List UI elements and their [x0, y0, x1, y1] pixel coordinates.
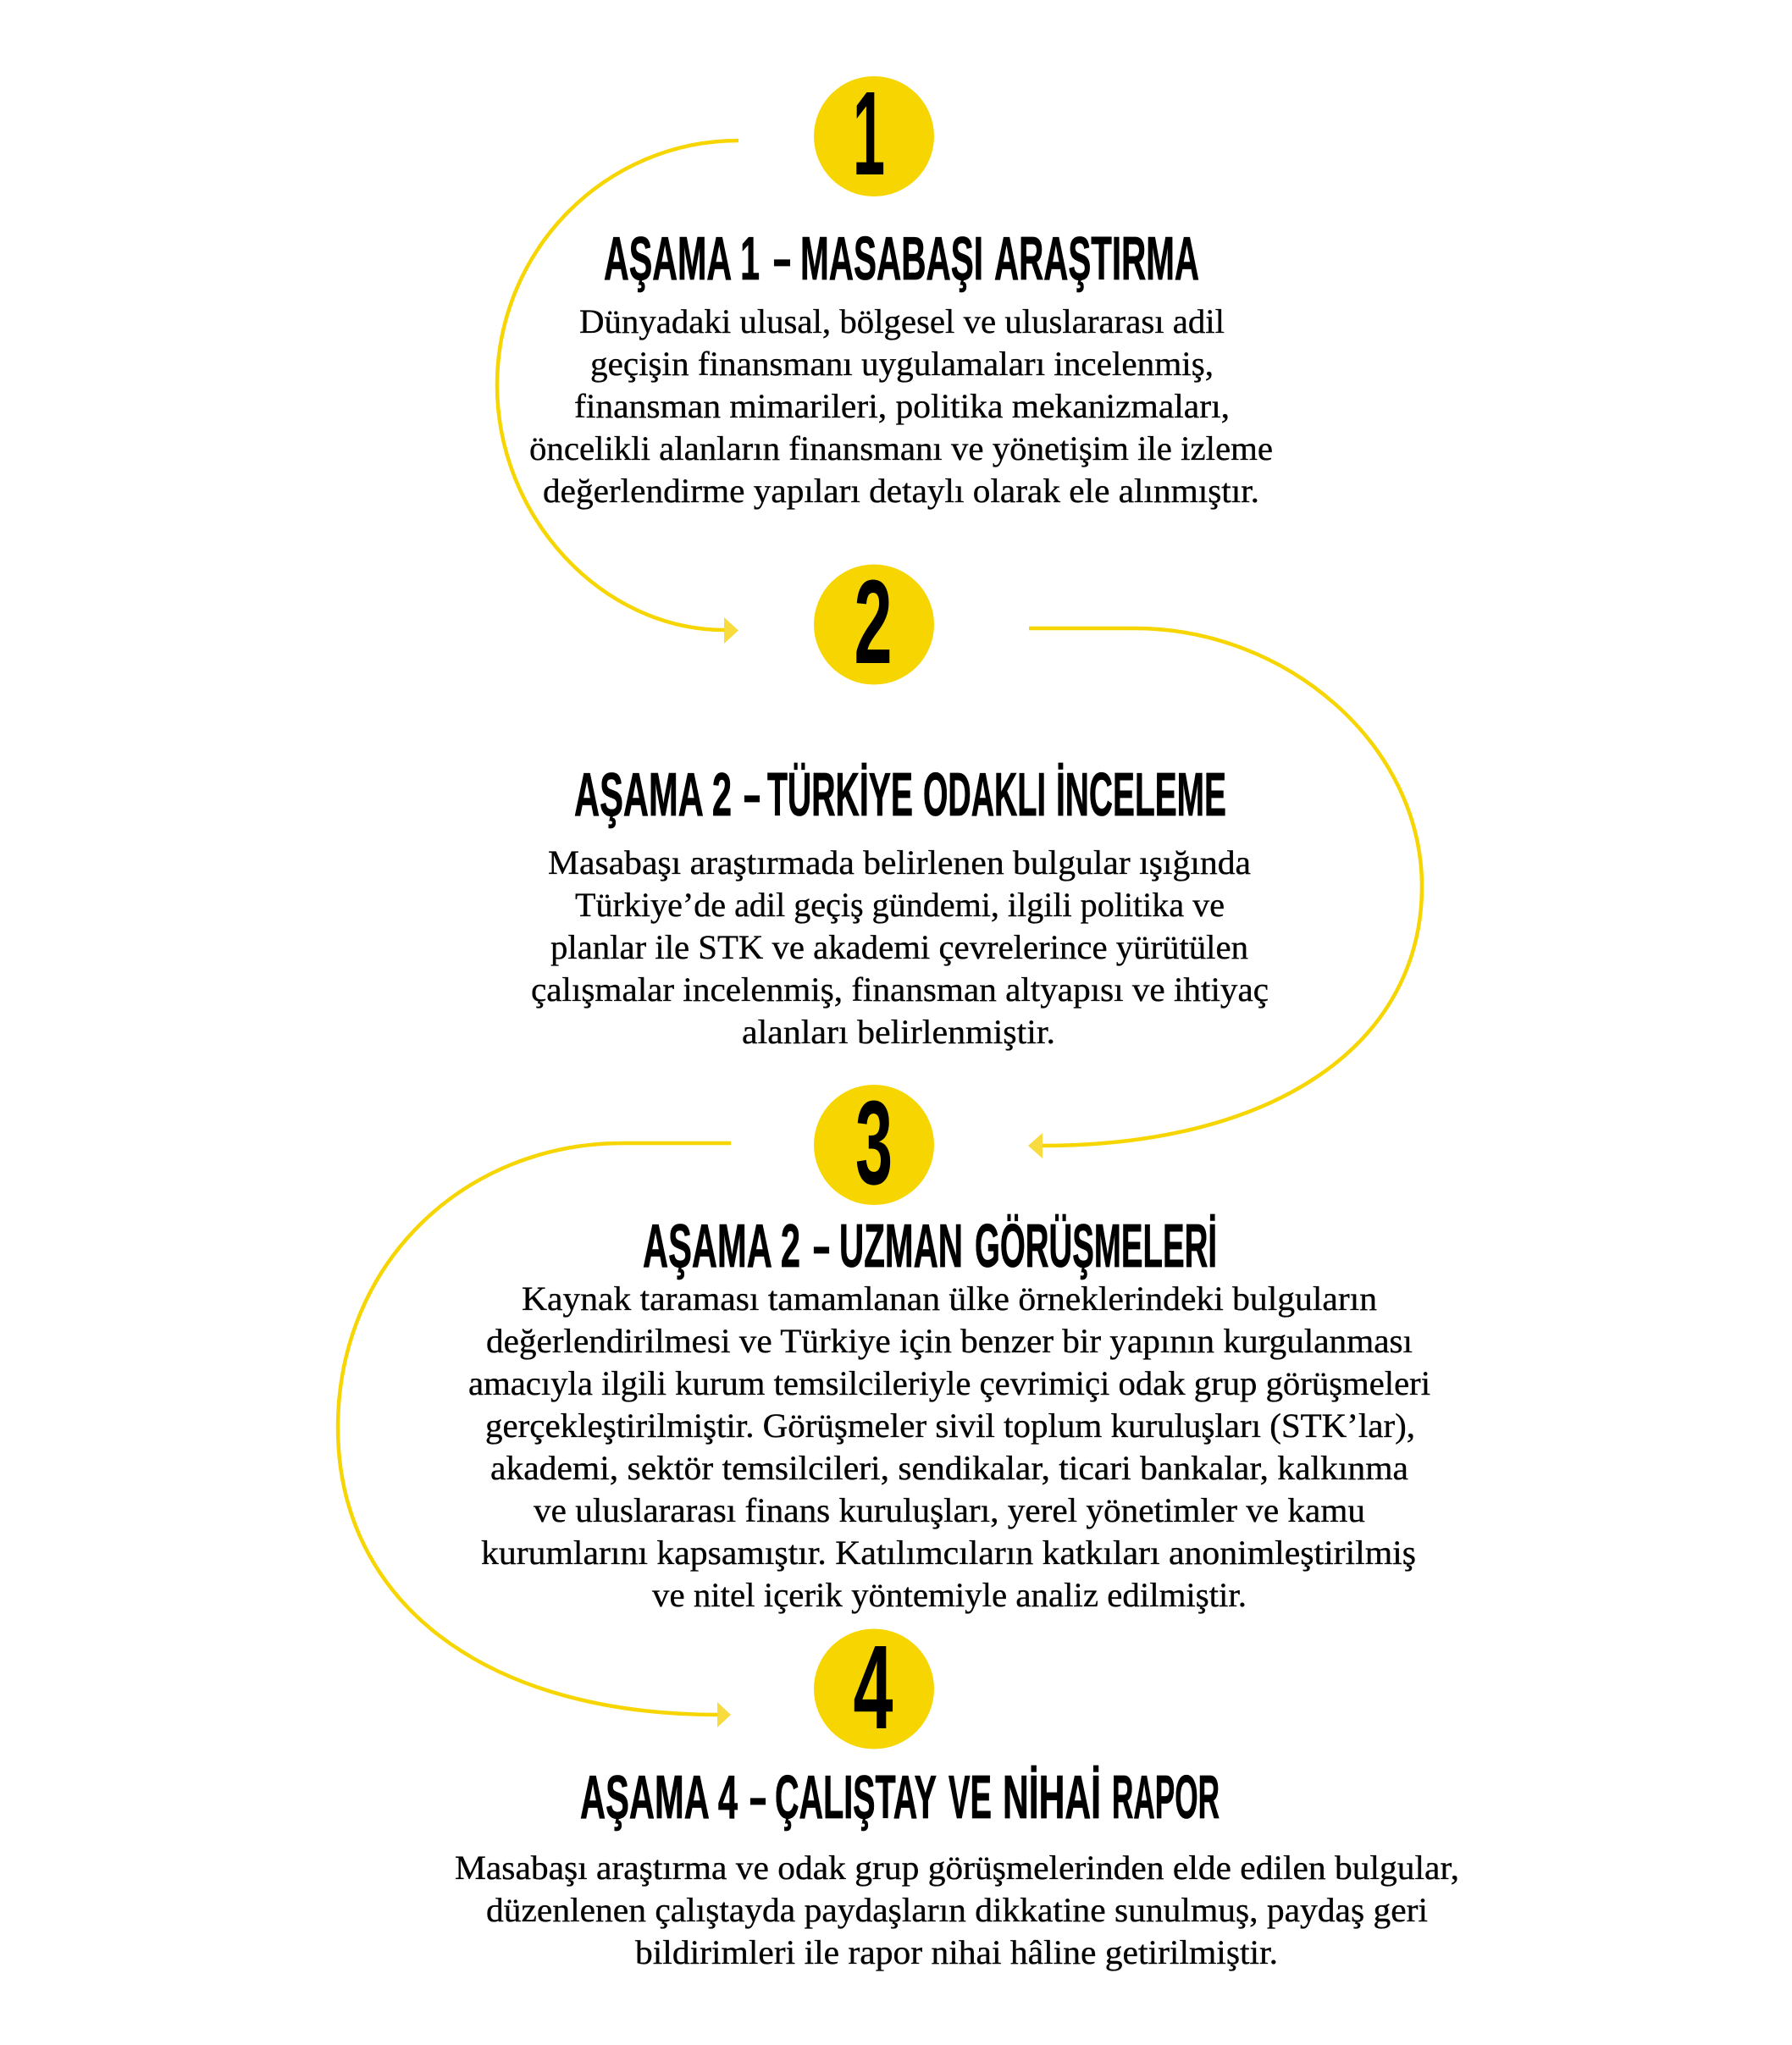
heading 3: [643, 1213, 1217, 1280]
heading 4: –: [749, 1764, 766, 1832]
heading 4: [580, 1764, 1220, 1832]
body text 3: Kaynak taraması tamamlanan ülke örneklerindeki bulguların: [522, 1280, 1377, 1318]
arrow: step 2 to step 3: [1028, 628, 1422, 1158]
heading 1: MASABAŞI: [800, 225, 983, 293]
heading 3: UZMAN: [839, 1213, 963, 1280]
body text 3: değerlendirilmesi ve Türkiye için benzer bir yapının kurgulanması: [486, 1322, 1413, 1360]
number badge 4: [814, 1620, 934, 1754]
step 1: [529, 66, 1273, 510]
body text 2: [531, 843, 1269, 1051]
number badge 2: 2: [854, 555, 893, 688]
heading 1: [604, 225, 1199, 293]
heading 4: ÇALIŞTAY: [775, 1764, 937, 1832]
heading 1: ARAŞTIRMA: [994, 225, 1199, 293]
body text 2: Masabaşı araştırmada belirlenen bulgular ışığında: [548, 843, 1251, 882]
heading 4: NİHAİ: [1003, 1764, 1101, 1832]
body text 2: çalışmalar incelenmiş, finansman altyapısı ve ihtiyaç: [531, 970, 1269, 1009]
heading 1: –: [773, 225, 791, 293]
arrow: step 1 to step 2: [497, 141, 738, 644]
number badge 3: [814, 1075, 934, 1209]
heading 2: AŞAMA 2: [574, 761, 732, 829]
step 3: [468, 1075, 1430, 1614]
body text 4: düzenlenen çalıştayda paydaşların dikkatine sunulmuş, paydaş geri: [486, 1891, 1428, 1929]
heading 2: –: [744, 761, 760, 829]
number badge 4: 4: [854, 1620, 893, 1754]
heading 2: [574, 761, 1226, 829]
heading 4: AŞAMA 4: [580, 1764, 738, 1832]
arrow: step 3 to step 4: [338, 1143, 731, 1727]
body text 1: öncelikli alanların finansmanı ve yönetişim ile izleme: [529, 429, 1273, 467]
body text 3: akademi, sektör temsilcileri, sendikalar, ticari bankalar, kalkınma: [490, 1449, 1408, 1487]
number badge 3: 3: [855, 1075, 893, 1209]
body text 4: [455, 1849, 1459, 1971]
body text 1: [529, 302, 1273, 510]
body text 3: gerçekleştirilmiştir. Görüşmeler sivil toplum kuruluşları (STK’lar),: [485, 1407, 1415, 1445]
body text 3: kurumlarını kapsamıştır. Katılımcıların katkıları anonimleştirilmiş: [481, 1534, 1416, 1572]
body text 1: geçişin finansmanı uygulamaları incelenmiş,: [590, 345, 1214, 383]
step 4: RAPOR: [1112, 1764, 1220, 1832]
body text 3: ve uluslararası finans kuruluşları, yerel yönetimler ve kamu: [534, 1491, 1365, 1529]
heading 3: AŞAMA 2: [643, 1213, 800, 1280]
heading 1: AŞAMA 1: [604, 225, 760, 293]
body text 1: değerlendirme yapıları detaylı olarak ele alınmıştır.: [543, 472, 1259, 510]
heading 3: –: [813, 1213, 830, 1280]
heading 2: İNCELEME: [1056, 761, 1226, 829]
body text 4: bildirimleri ile rapor nihai hâline getirilmiştir.: [635, 1933, 1278, 1971]
step 4: [455, 1620, 1459, 1971]
body text 3: [468, 1280, 1430, 1614]
body text 3: ve nitel içerik yöntemiyle analiz edilmiştir.: [652, 1576, 1247, 1614]
body text 3: amacıyla ilgili kurum temsilcileriyle çevrimiçi odak grup görüşmeleri: [468, 1364, 1430, 1402]
body text 2: Türkiye’de adil geçiş gündemi, ilgili politika ve: [575, 886, 1225, 924]
body text 2: alanları belirlenmiştir.: [742, 1013, 1055, 1051]
number badge 1: [814, 66, 934, 200]
heading 4: VE: [949, 1764, 992, 1832]
heading 2: ODAKLI: [923, 761, 1046, 829]
heading 3: GÖRÜŞMELERİ: [975, 1213, 1217, 1280]
number badge 2: [814, 555, 934, 688]
heading 2: TÜRKİYE: [767, 761, 913, 829]
body text 1: Dünyadaki ulusal, bölgesel ve uluslararası adil: [579, 302, 1225, 340]
body text 2: planlar ile STK ve akademi çevrelerince yürütülen: [550, 928, 1248, 966]
body text 4: Masabaşı araştırma ve odak grup görüşmelerinden elde edilen bulgular,: [455, 1849, 1459, 1887]
step 2: [531, 555, 1269, 1051]
body text 1: finansman mimarileri, politika mekanizmaları,: [574, 387, 1230, 425]
number badge 1: 1: [853, 66, 885, 200]
